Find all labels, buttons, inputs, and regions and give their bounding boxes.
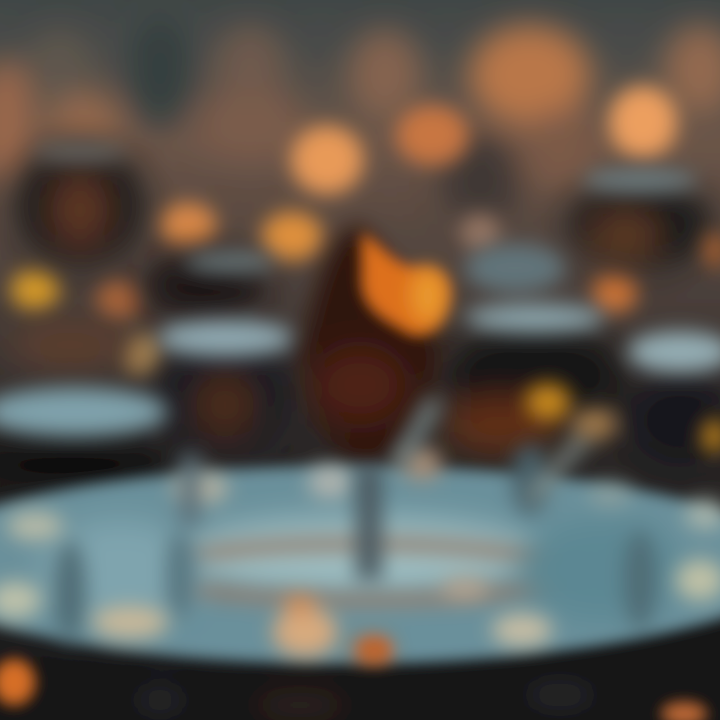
golden reflections xyxy=(526,232,720,452)
side glass stems xyxy=(180,400,590,525)
bottom corner lights xyxy=(0,638,706,720)
glass rims: pale blue bands xyxy=(0,142,720,436)
bright orange lights xyxy=(11,86,677,375)
bottom faint reflections xyxy=(130,681,600,719)
central glass: dark wine xyxy=(305,225,449,475)
dark table edge xyxy=(40,618,720,702)
distant warm lights xyxy=(0,15,720,225)
table highlights xyxy=(0,448,720,656)
glass bowls: dark interiors xyxy=(0,143,720,491)
central wine bowl xyxy=(305,225,440,475)
orange flame reflection xyxy=(362,232,449,335)
central stem and foot xyxy=(352,465,392,664)
table surface xyxy=(0,445,720,663)
